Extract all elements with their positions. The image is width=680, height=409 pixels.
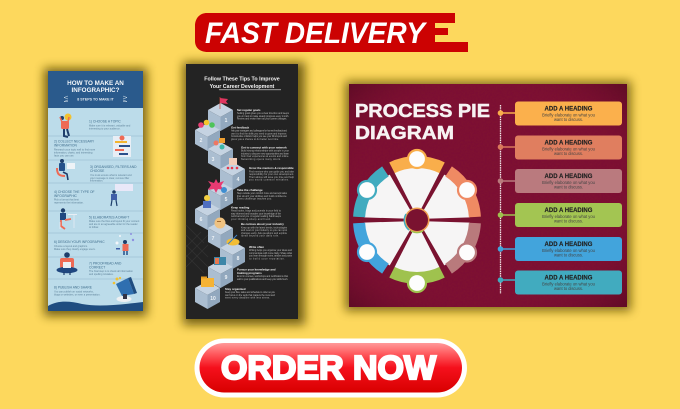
card 3: Briefly elaborate on what you xyxy=(542,180,595,185)
tip texts: Grow the mentors & responsible xyxy=(249,166,294,170)
step texts: 8) PUBLISH AND SHARE xyxy=(54,286,93,290)
button text: ORDER NOW xyxy=(221,349,437,386)
tip texts: communicate with more clarity. Share what xyxy=(249,252,292,255)
tip texts: Stay organized xyxy=(225,287,246,291)
step texts: interesting to your audience. xyxy=(89,128,121,130)
poster title: HOW TO MAKE AN xyxy=(67,80,124,87)
tip texts: Pursue your knowledge and xyxy=(237,268,276,272)
staircase cubes: 8 xyxy=(237,256,240,262)
tip texts: Read books, blogs and journals in your field to xyxy=(231,210,282,212)
tip texts: from their experiences at events and online. xyxy=(241,155,289,158)
tip texts: world around you. A regular reading habit keeps xyxy=(231,215,282,218)
tip texts: responsibility for your own development. xyxy=(249,173,294,176)
card 5: Briefly elaborate on what you xyxy=(542,248,595,253)
step texts: information, charts, and interesting xyxy=(54,152,93,154)
card 3: ADD A HEADING xyxy=(545,174,593,180)
poster title: 8 STEPS TO MAKE IT xyxy=(77,98,115,102)
staircase cubes: 3 xyxy=(212,157,215,163)
white wedges xyxy=(364,167,470,273)
step texts: to follow. xyxy=(89,226,99,229)
poster title: INFOGRAPHIC? xyxy=(72,87,120,94)
tip texts: Set regular goals xyxy=(237,108,261,112)
staircase cubes: 9 xyxy=(225,275,228,281)
card 5: ADD A HEADING xyxy=(545,242,593,248)
step texts: INFOGRAPHIC xyxy=(54,194,78,198)
illustration: seated figure xyxy=(60,208,77,229)
card 2 xyxy=(515,136,622,160)
step texts: blogs or websites, or even a presentation. xyxy=(54,293,101,296)
outer coloured ring xyxy=(359,162,475,278)
tip texts: Setting goals gives you a clear direction and keeps xyxy=(237,112,290,115)
step texts: 7) PROOFREAD AND xyxy=(89,262,122,266)
poster title xyxy=(64,80,127,102)
tip texts xyxy=(225,108,295,300)
step texts: and spelling mistakes. xyxy=(89,273,114,276)
card 4: Briefly elaborate on what you xyxy=(542,214,595,219)
tip texts: Write often xyxy=(249,245,264,249)
staircase cubes: 4 xyxy=(237,177,240,183)
step texts: The final step is to check all information xyxy=(89,270,133,273)
step texts: 5) ELABORATES A DRAFT xyxy=(89,216,129,220)
poster: how to make an infographic xyxy=(44,68,147,316)
tip texts: and news in your industry so you can spot xyxy=(241,229,287,232)
tip texts: Enrol in courses, workshops and certifications that xyxy=(237,275,288,278)
card 1: want to discuss. xyxy=(554,117,583,122)
tip texts: stay informed and broaden your knowledge of the xyxy=(231,212,282,215)
card 2: ADD A HEADING xyxy=(545,140,593,146)
tip texts: Networking opens many doors. xyxy=(241,158,281,161)
tip texts: to build your reputation. xyxy=(249,257,285,260)
bottom wave xyxy=(48,302,143,311)
staircase cubes: 5 xyxy=(225,197,228,203)
tip texts: Ask your managers and colleagues for honest feedback and xyxy=(231,130,288,132)
tip texts: Writing helps you organise your ideas and xyxy=(249,249,293,252)
step texts: Research your topic well to find more xyxy=(54,148,96,152)
tip texts: Their advice will save you time and help xyxy=(249,176,295,179)
illustration: person holding bulb xyxy=(60,114,72,137)
diagram title: DIAGRAM xyxy=(355,122,454,143)
step texts: You must ensure what is relevant and xyxy=(90,174,132,177)
staircase cubes: 7 xyxy=(212,236,215,242)
illustration: woman with charts xyxy=(111,184,133,206)
tip texts: Take the challenge xyxy=(237,188,263,192)
card 6 xyxy=(515,270,622,294)
card 3: want to discuss. xyxy=(554,184,583,190)
poster: career development tips xyxy=(183,62,305,325)
card 5 xyxy=(515,237,622,261)
pie diagram xyxy=(351,150,483,292)
tip texts: Constructive criticism helps you see your blind spots and xyxy=(231,135,288,138)
tip texts: you on track to make steady progress every month. xyxy=(237,115,289,118)
tip texts: ideas beyond your daily role. xyxy=(241,234,279,238)
timeline xyxy=(498,105,515,294)
step texts: and are in an agreeable order for the reader xyxy=(89,223,138,226)
spokes xyxy=(351,160,483,280)
tip texts: Every challenge teaches you. xyxy=(237,198,272,200)
banner text: FAST DELIVERY xyxy=(205,17,428,50)
centre hub xyxy=(404,208,430,232)
illustration: woman with icons xyxy=(116,233,134,255)
fast delivery banner xyxy=(195,13,468,52)
illustration: person at desk xyxy=(57,159,75,180)
step texts: your message is clear, remove filler xyxy=(90,177,129,180)
tip texts: Get to connect with your network xyxy=(241,146,287,150)
staircase cubes: 2 xyxy=(200,138,203,144)
tip texts: Find mentors who can guide you and take xyxy=(249,170,295,173)
illustration: document stack xyxy=(113,136,131,157)
tip texts: training programs xyxy=(237,271,262,275)
step texts: Choose a layout and graphics. xyxy=(54,245,88,248)
diagram title xyxy=(355,100,490,143)
tip texts: you avoid common mistakes. xyxy=(249,178,289,182)
card 6: want to discuss. xyxy=(554,286,583,291)
tip texts: industry to discover new opportunities and learn xyxy=(241,152,290,155)
card 4: want to discuss. xyxy=(554,218,583,224)
step texts: CORRECT xyxy=(89,266,105,270)
staircase cubes: 6 xyxy=(200,217,203,223)
poster title: Follow These Tips To Improve xyxy=(204,76,280,82)
poster title: Your Career Development xyxy=(210,84,275,90)
step texts: 4) CHOOSE THE TYPE OF xyxy=(54,190,95,194)
order now button xyxy=(194,338,467,398)
step texts: 6) DESIGN YOUR INFOGRAPHIC xyxy=(54,240,105,244)
tip texts: Keep up with the latest trends, technologies xyxy=(241,226,288,229)
card 1: Briefly elaborate on what you xyxy=(542,112,595,118)
step texts: represents the information. xyxy=(54,202,84,204)
step texts: INFORMATION xyxy=(54,144,77,148)
card 6: ADD A HEADING xyxy=(545,276,593,282)
tip texts: changes early. Ask questions and explore xyxy=(241,232,288,235)
card 3 xyxy=(515,169,622,193)
tip texts: add to your qualifications and keep your skills fresh. xyxy=(237,278,288,281)
illustration: megaphone xyxy=(113,277,137,302)
cube icons xyxy=(198,97,240,287)
card 6: Briefly elaborate on what you xyxy=(542,282,595,286)
tip texts: Keep reading xyxy=(231,206,250,210)
card 2: want to discuss. xyxy=(554,151,583,156)
tip texts: that stretch your abilities and build confidence. xyxy=(237,195,287,198)
step texts: 2) COLLECT NECESSARY xyxy=(54,140,95,144)
step texts: 3) ORGANISED, FILTERS AND xyxy=(90,165,137,169)
step texts: facts you can use. xyxy=(54,154,74,158)
staircase cubes: 10 xyxy=(210,296,216,302)
step texts: Pick a format that best xyxy=(54,198,79,202)
tip texts: Get feedback xyxy=(231,126,250,130)
step texts: 1) CHOOSE A TOPIC xyxy=(89,120,121,124)
tip texts: Review and revise them as your career changes. xyxy=(237,118,287,120)
tip texts: gives you a chance to do better next time. xyxy=(231,138,279,141)
illustration: meditating person with laptop xyxy=(56,252,78,275)
poster: process pie diagram xyxy=(345,81,631,311)
tip texts: Be curious about your industry xyxy=(241,222,284,226)
tip texts: meet every deadline with less stress. xyxy=(225,296,270,300)
card 5: want to discuss. xyxy=(554,252,583,258)
tip texts: can focus on the work that matters the most and xyxy=(225,294,276,297)
step texts xyxy=(54,120,140,296)
step texts: You can publish on social networks, xyxy=(54,290,94,293)
node circles xyxy=(358,150,476,292)
tip texts: Step outside your comfort zone and accept tasks xyxy=(237,192,288,195)
step texts: CHOOSE xyxy=(90,169,105,173)
step texts: Make sure the flow and layout fit your content xyxy=(89,220,140,223)
tip texts: you learn through notes, articles and posts xyxy=(249,254,293,258)
card 4: ADD A HEADING xyxy=(545,208,593,214)
staircase cubes: 1 xyxy=(225,118,228,124)
poster title xyxy=(204,76,281,90)
card 1: ADD A HEADING xyxy=(545,106,593,112)
card 4 xyxy=(515,203,622,227)
tip texts: use it to find the skills you need to grow and improve. xyxy=(231,132,287,135)
diagram title: PROCESS PIE xyxy=(355,100,490,121)
step texts: Make sure they clearly engage users. xyxy=(54,248,96,251)
card 2: Briefly elaborate on what you xyxy=(542,146,595,152)
tip texts: your thinking sharp and fresh. xyxy=(231,218,271,221)
step texts: information. xyxy=(90,180,103,182)
step texts: Make sure it is relevant, valuable and xyxy=(89,124,131,128)
tip texts: Keep your files, tasks and schedule in order so you xyxy=(225,291,276,294)
card 1 xyxy=(515,102,622,126)
tip texts: Build strong relationships with people in your xyxy=(241,150,289,152)
staircase cubes xyxy=(195,103,245,309)
